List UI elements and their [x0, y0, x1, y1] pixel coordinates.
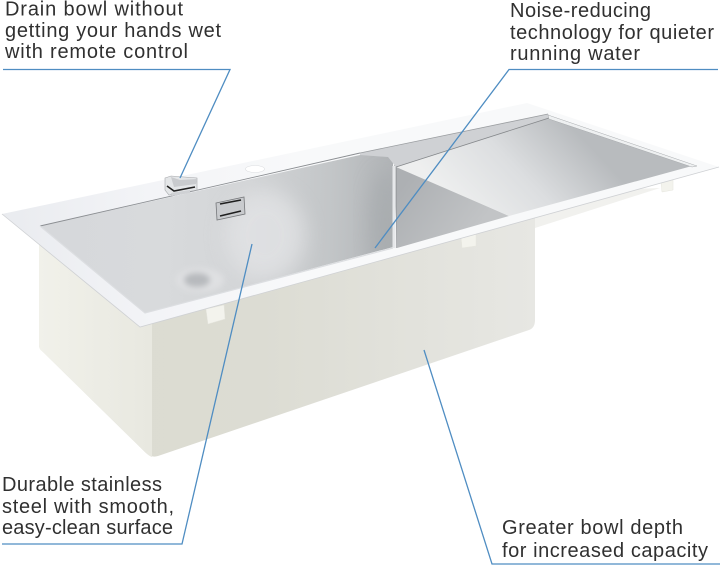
rim front edge	[2, 167, 719, 327]
callout: remote drain	[3, 0, 230, 178]
basin body	[39, 188, 660, 457]
drainer back strip	[360, 114, 552, 167]
text: bowl depth: for increased capacity	[502, 540, 708, 562]
text: remote drain: with remote control	[4, 41, 188, 63]
text: bowl depth	[502, 517, 708, 562]
text: stainless steel: easy-clean surface	[2, 517, 173, 539]
mounting clips	[206, 178, 673, 324]
text: bowl depth: Greater bowl depth	[502, 517, 683, 539]
countertop rim	[2, 103, 719, 327]
text: noise reduction	[510, 0, 714, 65]
bowl drain	[176, 268, 224, 292]
overflow	[216, 197, 245, 220]
callout: bowl depth	[424, 350, 720, 564]
drainer surface	[396, 118, 692, 216]
bowl side wall	[394, 165, 509, 248]
main bowl floor	[40, 149, 401, 313]
text: noise reduction: Noise-reducing	[510, 0, 651, 22]
leader line: noise reduction	[375, 70, 718, 248]
text: noise reduction: technology for quieter	[510, 22, 714, 44]
sink illustration	[2, 103, 719, 457]
leader line: bowl depth	[424, 350, 720, 564]
text: stainless steel: Durable stainless	[2, 474, 162, 496]
tap hole	[246, 166, 264, 172]
text: noise reduction: running water	[510, 43, 640, 65]
leader line: stainless steel	[2, 244, 252, 544]
remote control button	[165, 176, 197, 196]
text: stainless steel	[2, 474, 174, 539]
drainer edge highlight	[548, 115, 697, 167]
text: remote drain: getting your hands wet	[5, 20, 221, 42]
callout: stainless steel	[2, 244, 252, 544]
callout: noise reduction	[375, 0, 718, 248]
text: stainless steel: steel with smooth,	[2, 496, 174, 518]
text: remote drain	[4, 0, 221, 63]
leader line: remote drain	[3, 70, 230, 178]
